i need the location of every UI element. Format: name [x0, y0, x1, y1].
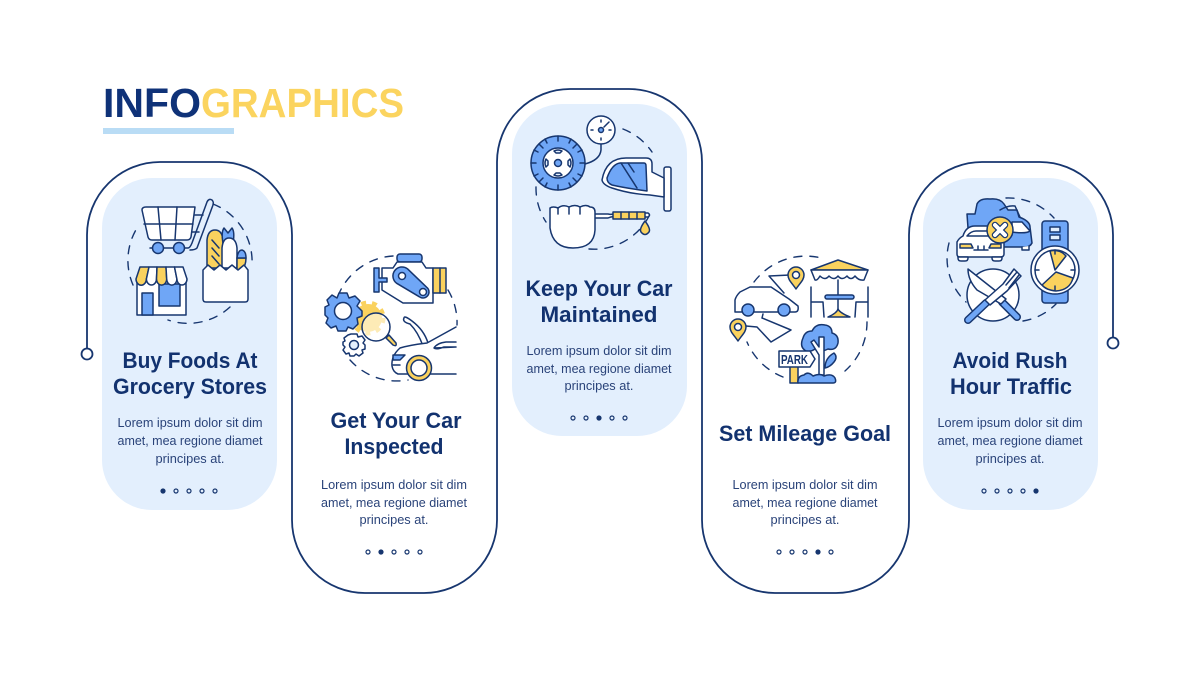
icon: engine, gears, magnifier and car — [325, 254, 457, 381]
body text — [732, 478, 878, 527]
heading: Set Mileage Goal — [719, 421, 891, 446]
body text: amet, mea regione diamet — [732, 496, 878, 510]
heading — [330, 408, 462, 459]
title: INFO — [103, 80, 201, 126]
body text: principes at. — [770, 513, 840, 527]
body text: principes at. — [360, 513, 428, 527]
title: GRAPHICS — [201, 80, 404, 126]
heading: Avoid Rush — [952, 348, 1068, 373]
icon: car route, pins, cafe table and park: PARK — [781, 352, 808, 367]
body text — [938, 416, 1083, 466]
heading: Grocery Stores — [113, 374, 267, 399]
body text: Lorem ipsum dolor sit dim — [118, 416, 262, 430]
pagination dots — [982, 489, 1038, 493]
heading: Maintained — [540, 302, 658, 327]
title — [103, 80, 404, 134]
body text — [321, 478, 468, 527]
panel: mileage goal — [719, 256, 891, 554]
body text: principes at. — [564, 379, 634, 393]
panel: car maintenance — [526, 116, 673, 420]
body text: principes at. — [156, 452, 224, 466]
pagination dots — [366, 550, 422, 554]
body text: Lorem ipsum dolor sit dim — [732, 478, 878, 492]
icon: cart, shop and grocery bag — [128, 199, 252, 323]
icon: traffic cars, watch and cutlery — [947, 198, 1079, 321]
heading: Hour Traffic — [950, 374, 1072, 399]
pagination dots — [571, 416, 627, 420]
body text: amet, mea regione diamet — [938, 434, 1083, 448]
panel: grocery stores — [113, 199, 267, 493]
heading — [950, 348, 1072, 399]
panel: car inspection — [321, 254, 468, 554]
pagination dots — [161, 489, 217, 493]
pagination dots — [777, 550, 833, 554]
body text: amet, mea regione diamet — [526, 362, 672, 376]
body text: principes at. — [976, 452, 1044, 466]
connecting outline — [82, 89, 1118, 593]
heading — [526, 276, 673, 327]
body text: amet, mea regione diamet — [321, 496, 468, 510]
icon: car route, pins, cafe table and park — [730, 256, 868, 383]
body text: Lorem ipsum dolor sit dim — [526, 344, 672, 358]
heading: Get Your Car — [330, 408, 462, 433]
panel backgrounds — [102, 104, 1098, 510]
heading: Buy Foods At — [122, 348, 258, 373]
body text — [118, 416, 263, 466]
heading: Inspected — [344, 434, 444, 459]
icon: tire, gauge, mirror and screwdriver hand — [531, 116, 671, 249]
body text: Lorem ipsum dolor sit dim — [938, 416, 1082, 430]
heading: Keep Your Car — [526, 276, 673, 301]
body text: Lorem ipsum dolor sit dim — [321, 478, 467, 492]
panel: rush hour traffic — [938, 198, 1083, 493]
body text: amet, mea regione diamet — [118, 434, 263, 448]
heading — [113, 348, 267, 399]
body text — [526, 344, 672, 393]
